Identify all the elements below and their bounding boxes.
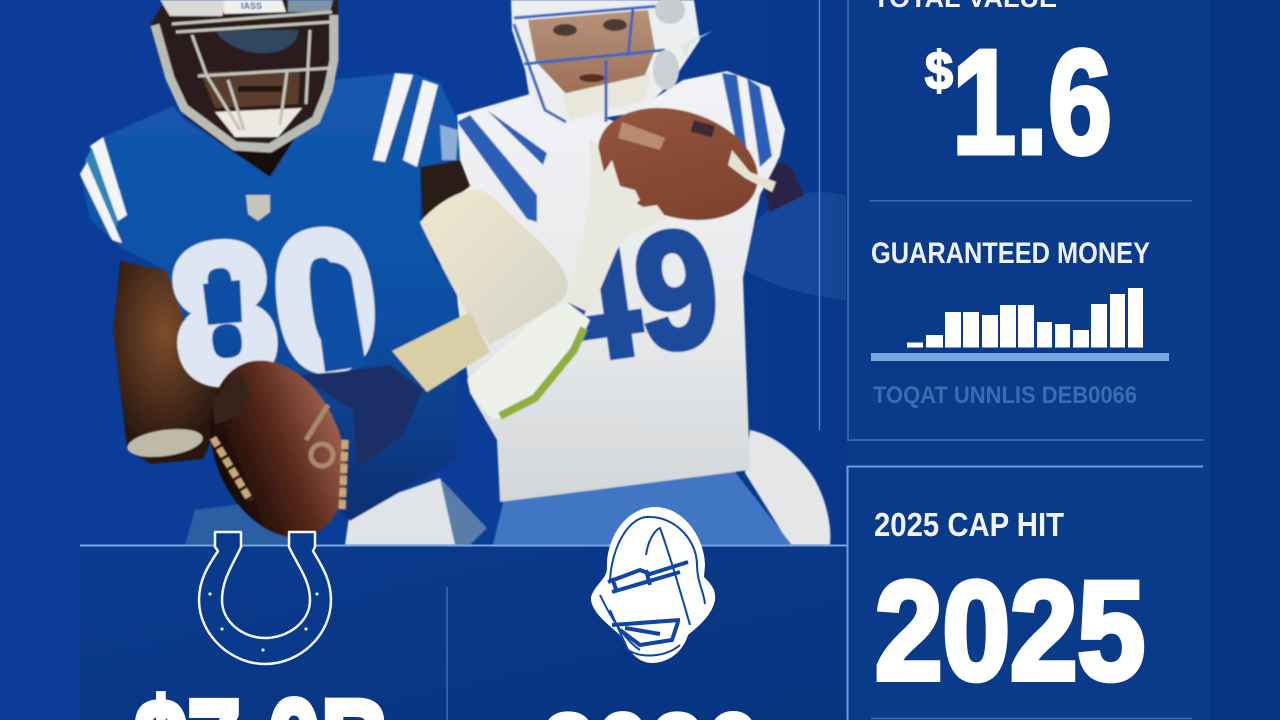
- wrist band: [126, 425, 204, 461]
- icon: horseshoe: [199, 532, 331, 664]
- jersey: [457, 71, 785, 502]
- hand and glove: [567, 139, 667, 313]
- panel: 2025 cap hit: [874, 506, 1145, 709]
- icon: helmet: [591, 507, 715, 663]
- section rule: [870, 200, 1192, 202]
- panel: guaranteed money: [871, 237, 1169, 409]
- hand over the ball: [212, 372, 250, 425]
- forearm: [467, 302, 590, 420]
- helmet: [150, 0, 338, 150]
- neck: [183, 80, 335, 180]
- left arm: [113, 261, 227, 464]
- cap hit heading: 2025 CAP HIT: [874, 506, 1064, 543]
- upper arm: [420, 160, 470, 222]
- player: white jersey receiver: [457, 0, 830, 545]
- chart axis bar: [871, 353, 1169, 361]
- jersey: [80, 72, 460, 521]
- pants: [493, 472, 792, 545]
- football: [584, 89, 776, 239]
- forearm green edge: [500, 328, 584, 416]
- player: blue jersey receiver: [80, 0, 568, 558]
- cap hit number: 2025: [875, 552, 1145, 709]
- background swoosh: [745, 192, 846, 300]
- total value number: 1.6: [952, 20, 1112, 185]
- faded caption: TOQAT UNNLIS DEB0066: [873, 382, 1137, 409]
- sleeve stripes: [457, 73, 772, 222]
- guaranteed money heading: GUARANTEED MONEY: [871, 237, 1150, 270]
- jersey number: 49: [545, 193, 729, 398]
- helmet: [511, 0, 712, 124]
- football: [185, 340, 371, 558]
- dollar sign: $: [925, 41, 953, 101]
- far arm: [758, 160, 804, 212]
- sleeve stripes: [80, 73, 458, 243]
- bar chart: [907, 288, 1143, 348]
- collar badge: [246, 195, 270, 221]
- wrist tape: [392, 312, 490, 392]
- jersey number: 80: [160, 186, 390, 428]
- glove: [300, 365, 423, 469]
- helmet: IASS: [241, 1, 262, 11]
- arm bandage: [420, 189, 568, 345]
- lower pants: [185, 478, 487, 545]
- panel: total value: [870, 0, 1192, 202]
- back shape behind the player: [745, 430, 830, 545]
